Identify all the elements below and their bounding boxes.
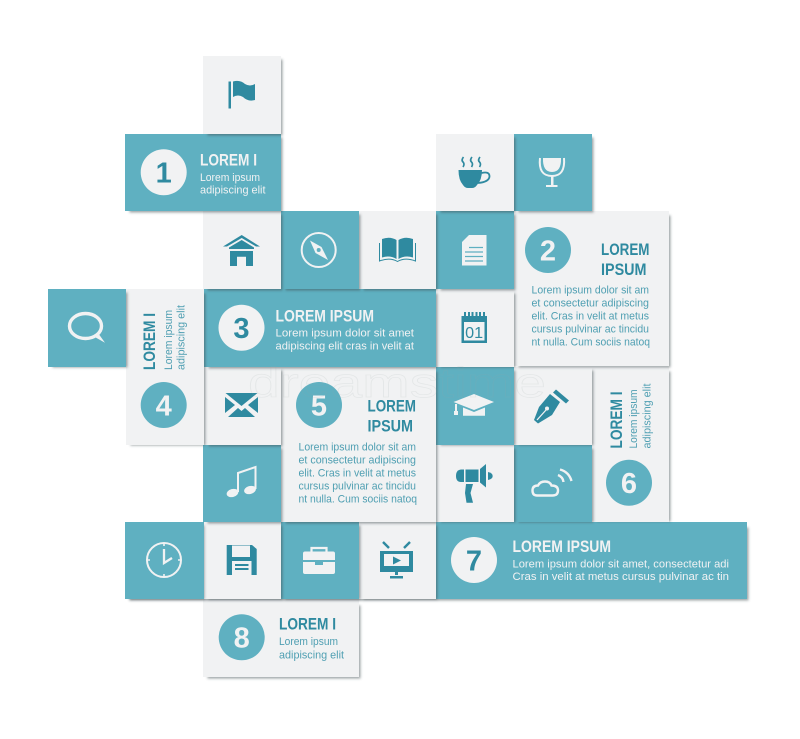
panel: 7	[130, 522, 748, 600]
panel: music tile	[203, 445, 282, 524]
panel: 6	[592, 367, 670, 522]
panel: clock tile	[125, 522, 204, 600]
panel: save tile	[204, 522, 282, 600]
body text: Lorem ipsum	[628, 390, 640, 448]
panel: 8	[203, 599, 360, 678]
icon: megaphone	[456, 464, 493, 503]
panel: pen tile	[514, 367, 594, 446]
body text	[298, 441, 417, 505]
icon: document	[462, 235, 486, 266]
icon: fountain pen	[534, 390, 569, 424]
body text: Lorem ipsum	[163, 310, 175, 370]
body text: adipiscing elit	[176, 305, 188, 370]
body text: nt nulla. Cum sociis natoq	[298, 493, 417, 505]
panel: 3	[204, 289, 438, 368]
body text: cursus pulvinar ac tincidu	[532, 323, 649, 335]
body text: Lorem ipsum dolor sit amet, consectetur adi	[512, 558, 729, 570]
body text: Lorem ipsum	[200, 172, 260, 184]
number badge 5: 5	[311, 390, 327, 422]
icon: envelope	[225, 393, 258, 417]
body text: adipiscing elit	[279, 649, 344, 661]
panel: wine glass tile	[514, 134, 594, 212]
number badge 7	[451, 537, 497, 583]
heading: LOREM	[368, 398, 416, 416]
number badge 4: 4	[156, 390, 172, 422]
body text: cursus pulvinar ac tincidu	[298, 480, 416, 492]
panel: calendar tile	[436, 289, 516, 368]
body text	[200, 172, 266, 197]
icon: flag	[228, 81, 255, 108]
body text: Cras in velit at metus cursus pulvinar ac tin	[512, 571, 729, 583]
body text	[512, 558, 729, 583]
icon: television	[380, 542, 413, 578]
heading: LOREM I	[200, 152, 257, 170]
body text	[279, 636, 344, 661]
body text: adipiscing elit	[642, 384, 654, 448]
number badge 1	[141, 149, 187, 195]
number badge 4	[141, 382, 187, 428]
panel: 1	[125, 134, 282, 212]
icon: graduation cap	[454, 394, 494, 416]
number badge 3: 3	[233, 313, 250, 345]
panel: flag tile	[203, 56, 282, 136]
panel: 5	[281, 367, 438, 524]
body text: Lorem ipsum dolor sit amet	[276, 328, 414, 340]
body text: elit. Cras in velit at metus	[532, 310, 649, 322]
number badge 8: 8	[234, 622, 250, 654]
icon: cloud with signal	[532, 470, 572, 496]
heading: LOREM	[601, 241, 650, 259]
icon: clock	[147, 543, 181, 577]
heading: LOREM IPSUM	[276, 308, 374, 326]
body text: et consectetur adipiscing	[532, 297, 649, 309]
body text: adipiscing elit cras in velit at	[276, 341, 414, 353]
panel: document tile	[436, 211, 516, 290]
panel: envelope tile	[204, 367, 282, 446]
panel: briefcase tile	[281, 522, 360, 600]
panel: megaphone tile	[436, 445, 516, 522]
number badge 3	[218, 305, 264, 351]
number badge 1: 1	[156, 158, 172, 190]
panel: tv tile	[359, 522, 438, 600]
icon: open book	[380, 238, 416, 262]
panel: cloud tile	[514, 445, 594, 522]
heading: IPSUM	[368, 418, 413, 436]
icon: coffee cup	[458, 157, 490, 188]
icon: house	[223, 235, 260, 266]
body text	[628, 384, 654, 448]
heading: IPSUM	[601, 261, 646, 279]
heading	[368, 398, 416, 436]
number badge 6	[606, 460, 652, 506]
panel: book tile	[359, 211, 438, 290]
icon: briefcase	[303, 548, 335, 574]
body text: adipiscing elit	[200, 185, 266, 197]
icon: trophy glass	[540, 158, 564, 187]
number badge 6: 6	[621, 468, 637, 500]
panel: compass tile	[281, 211, 360, 290]
body text	[276, 328, 414, 353]
body text: nt nulla. Cum sociis natoq	[532, 336, 650, 348]
number badge 5	[296, 382, 342, 428]
panel: 2	[514, 211, 670, 368]
body text: et consectetur adipiscing	[298, 454, 416, 466]
icon: calendar: 01	[465, 325, 483, 342]
body text	[163, 305, 188, 370]
heading: LOREM I	[608, 392, 626, 448]
heading: LOREM I	[279, 616, 336, 634]
number badge 2: 2	[540, 236, 556, 268]
icon: speech bubble	[70, 314, 105, 343]
panel: speech bubble tile	[48, 289, 128, 368]
icon: music notes	[226, 467, 257, 498]
icon: compass	[302, 233, 336, 267]
body text	[532, 284, 650, 348]
icon: floppy disk	[227, 545, 257, 575]
panel: 4	[126, 289, 206, 446]
number badge 8	[219, 614, 265, 660]
heading: LOREM I	[141, 313, 159, 370]
panel: coffee tile	[436, 134, 516, 212]
number badge 7: 7	[466, 546, 482, 578]
panel: graduation cap tile	[436, 367, 516, 446]
body text: Lorem ipsum dolor sit am	[532, 284, 649, 296]
number badge 2	[525, 227, 571, 273]
watermark: dreamstime	[248, 359, 546, 406]
panel: home tile	[203, 211, 282, 290]
heading	[601, 241, 650, 279]
heading: LOREM IPSUM	[512, 538, 611, 556]
body text: elit. Cras in velit at metus	[298, 467, 416, 479]
body text: Lorem ipsum dolor sit am	[298, 441, 416, 453]
body text: Lorem ipsum	[279, 636, 338, 648]
